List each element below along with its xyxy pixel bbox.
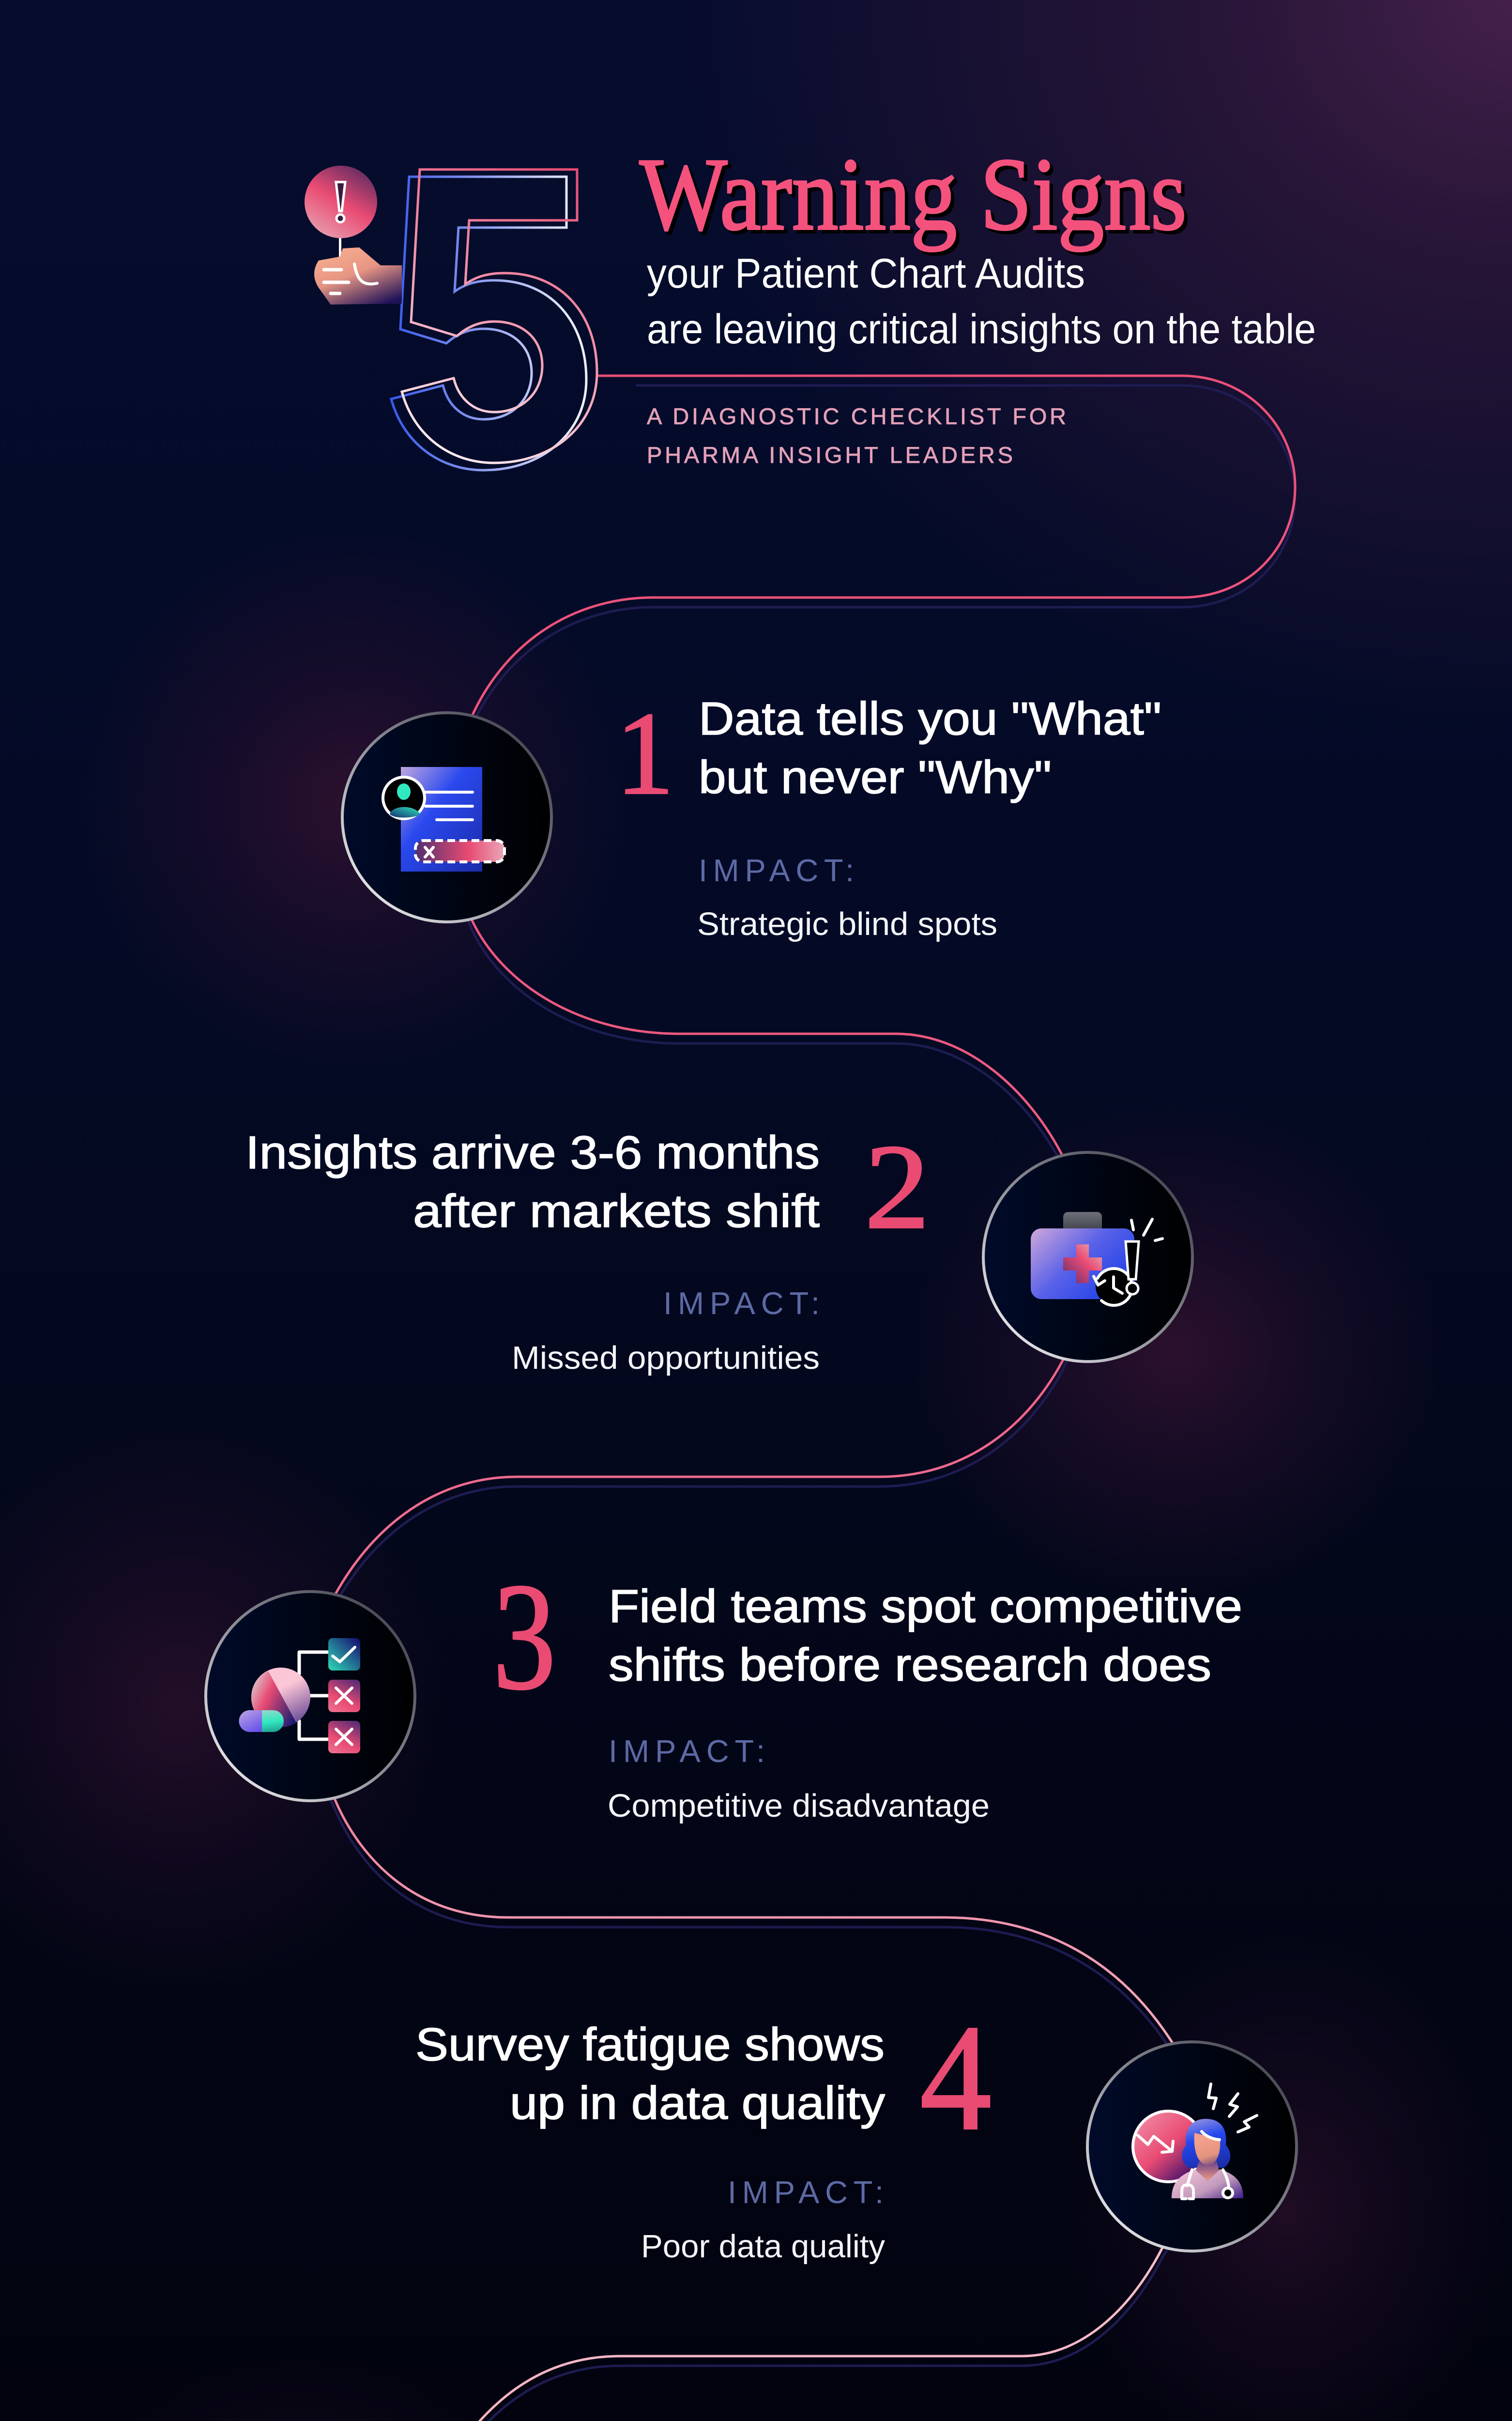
heading <box>699 693 1161 803</box>
diagnostic checklist tagline <box>647 403 1066 468</box>
header block <box>305 137 1316 470</box>
heading <box>609 1580 1242 1691</box>
icon: medical kit with clock <box>983 1152 1192 1362</box>
heading: Insights arrive 3-6 months <box>245 1127 820 1179</box>
subtitle: your Patient Chart Audits <box>647 250 1085 297</box>
impact value: Competitive disadvantage <box>608 1788 990 1824</box>
impact value: Strategic blind spots <box>697 906 997 942</box>
heading: but never "Why" <box>699 751 1052 803</box>
heading: Field teams spot competitive <box>609 1580 1242 1632</box>
glow: step 2 <box>905 1099 1448 1603</box>
step 3 <box>206 1552 1242 1824</box>
diagnostic checklist tagline: PHARMA INSIGHT LEADERS <box>647 442 1013 468</box>
impact label: IMPACT: <box>663 1286 820 1321</box>
number 4: 4 <box>920 1993 992 2161</box>
winding path pink line <box>310 376 1295 2421</box>
heading: after markets shift <box>413 1185 820 1237</box>
step 2 <box>245 1120 1192 1376</box>
step 1 <box>342 688 1161 942</box>
number 1: 1 <box>616 688 674 819</box>
winding path shadow line <box>310 385 1295 2421</box>
glow: step 4 <box>1065 1937 1511 2421</box>
icon: pie chart, pill and check list <box>206 1592 415 1801</box>
big outlined number 5 <box>391 169 597 470</box>
glow: step 3 <box>0 1414 450 1995</box>
impact label: IMPACT: <box>699 853 854 888</box>
impact label: IMPACT: <box>609 1733 765 1769</box>
title: Warning Signs <box>640 137 1187 252</box>
icon: hand holding warning sign <box>305 166 402 305</box>
heading: Survey fatigue shows <box>415 2019 885 2070</box>
number 3: 3 <box>493 1552 556 1721</box>
heading: Data tells you "What" <box>699 693 1161 745</box>
heading: up in data quality <box>510 2077 885 2129</box>
title: Warning Signs <box>643 140 1190 255</box>
heading: shifts before research does <box>609 1639 1211 1691</box>
glow: step 1 <box>82 533 625 1075</box>
step 4 <box>415 1993 1297 2265</box>
top right purple glow <box>665 0 1512 726</box>
number 2: 2 <box>865 1120 930 1254</box>
diagnostic checklist tagline: A DIAGNOSTIC CHECKLIST FOR <box>647 403 1066 429</box>
impact value: Poor data quality <box>641 2228 886 2265</box>
heading <box>245 1127 820 1237</box>
impact value: Missed opportunities <box>512 1340 820 1376</box>
subtitle <box>647 250 1316 352</box>
glow: step 5 <box>10 2353 591 2421</box>
icon: patient document <box>342 713 551 922</box>
subtitle: are leaving critical insights on the table <box>647 306 1316 352</box>
icon: stressed doctor with falling chart <box>1087 2042 1297 2251</box>
impact label: IMPACT: <box>728 2175 884 2210</box>
heading <box>415 2019 885 2129</box>
